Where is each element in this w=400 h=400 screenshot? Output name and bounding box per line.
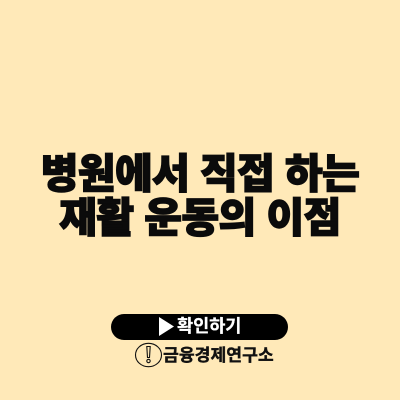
button label: 확인하기 [177,316,241,336]
source name: 금융경제연구소 [163,345,274,365]
title: 병원에서 직접 하는 [41,151,359,197]
icon: play triangle [159,317,174,336]
icon: exclamation in circle [134,342,162,368]
title [41,151,360,241]
title: 재활 운동의 이점 [59,195,341,241]
button: confirm [111,314,288,340]
